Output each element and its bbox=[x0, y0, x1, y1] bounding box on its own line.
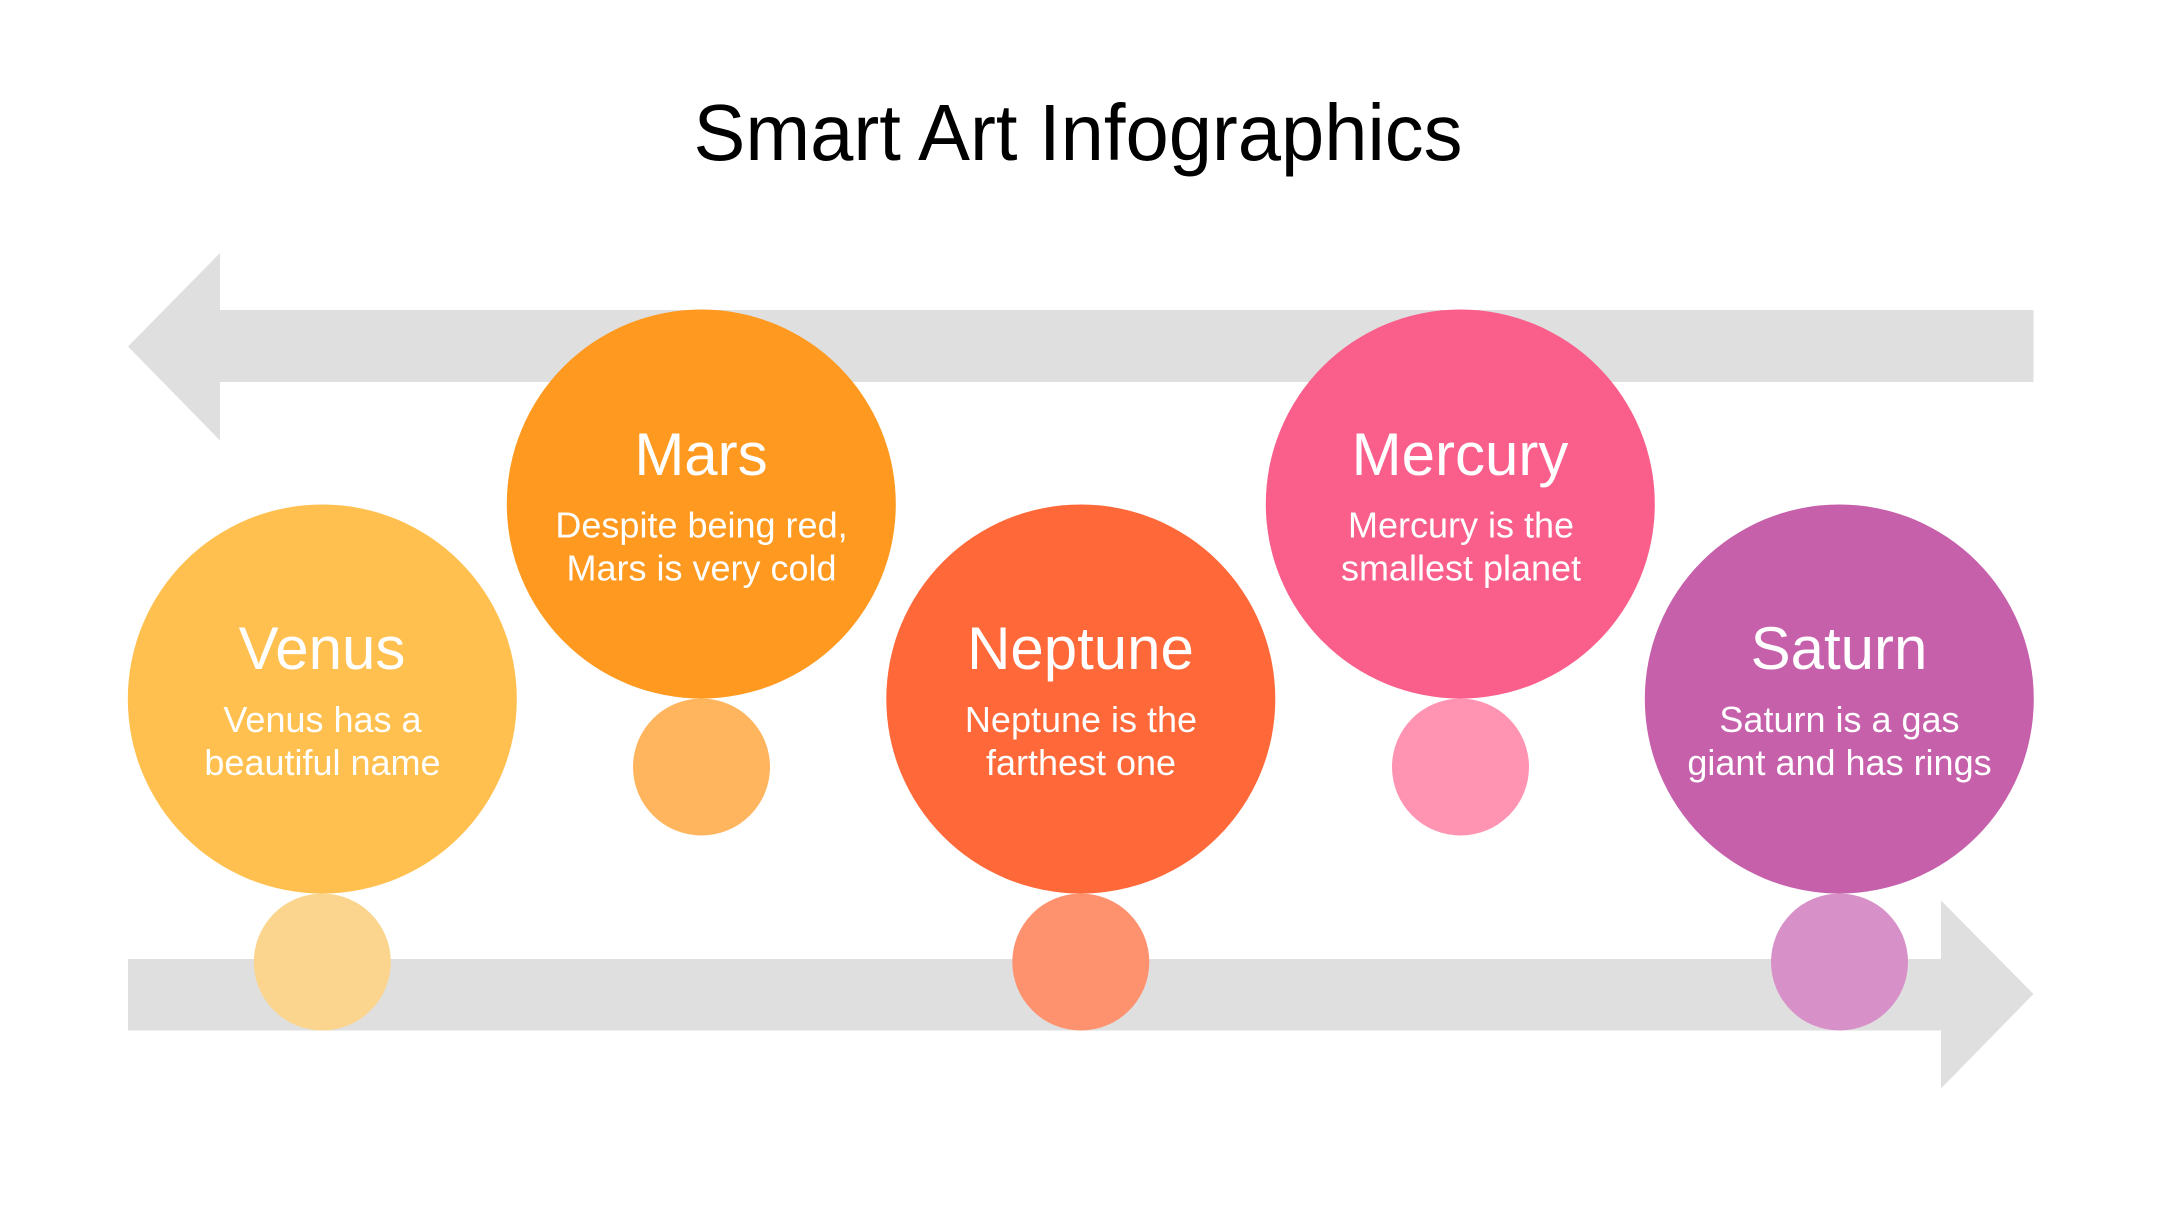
Mercury description: smallest planet bbox=[1341, 548, 1581, 588]
Venus heading: Venus bbox=[239, 615, 405, 682]
Mercury heading: Mercury bbox=[1352, 421, 1568, 488]
Venus description: beautiful name bbox=[204, 742, 441, 783]
Saturn heading: Saturn bbox=[1751, 615, 1927, 682]
Neptune description: Neptune is the bbox=[965, 699, 1197, 740]
Mars marker bbox=[633, 698, 770, 836]
arrow: bottom, pointing right bbox=[128, 900, 2034, 1088]
item: Neptune bbox=[886, 504, 1275, 1030]
Neptune marker bbox=[1012, 894, 1149, 1030]
Mercury marker bbox=[1392, 698, 1529, 836]
Saturn description: Saturn is a gas bbox=[1719, 699, 1960, 740]
Neptune heading: Neptune bbox=[967, 615, 1194, 682]
arrow: top, pointing left bbox=[128, 253, 2034, 440]
item: Mars bbox=[507, 310, 896, 836]
item: Saturn bbox=[1645, 504, 2034, 1030]
Mars heading: Mars bbox=[634, 421, 768, 488]
Saturn circle bbox=[1645, 504, 2034, 894]
title: Smart Art Infographics bbox=[694, 88, 1462, 177]
Saturn description: giant and has rings bbox=[1687, 742, 1992, 783]
Venus circle bbox=[128, 504, 517, 894]
Saturn marker bbox=[1771, 894, 1908, 1030]
Mars description: Mars is very cold bbox=[566, 548, 837, 588]
item: Mercury bbox=[1266, 310, 1655, 836]
Venus marker bbox=[254, 894, 391, 1030]
Neptune circle bbox=[886, 504, 1275, 894]
Mercury description: Mercury is the bbox=[1348, 504, 1574, 546]
Mars circle bbox=[507, 310, 896, 698]
Mars description: Despite being red, bbox=[555, 504, 848, 546]
Neptune description: farthest one bbox=[986, 742, 1176, 783]
Venus description: Venus has a bbox=[223, 699, 423, 740]
item: Venus bbox=[128, 504, 517, 1030]
Mercury circle bbox=[1266, 310, 1655, 698]
